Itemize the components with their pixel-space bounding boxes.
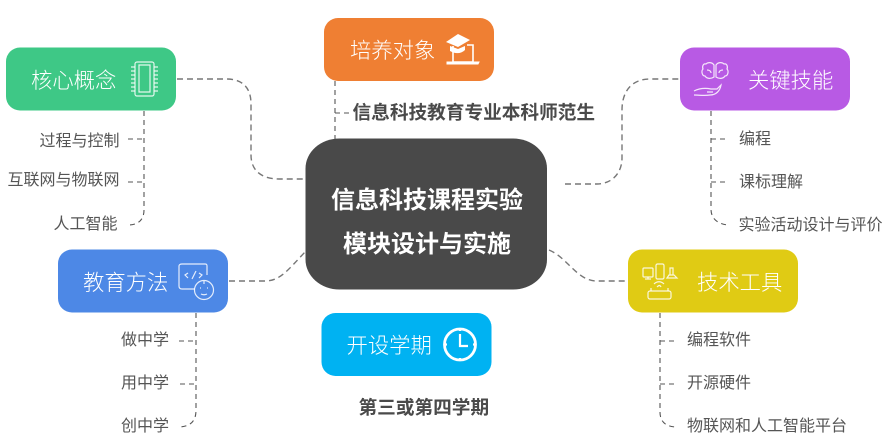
panel: 技术工具 — [628, 250, 798, 312]
panel: 教育方法: 教育方法 — [83, 271, 168, 295]
list: 关键技能 items — [738, 130, 883, 234]
connector: central topic to 核心概念 — [177, 79, 305, 179]
list: 关键技能 items: 编程 — [739, 130, 771, 148]
branch lines: 教育方法 — [179, 313, 196, 427]
branch lines: 关键技能 — [711, 111, 729, 225]
panel: 关键技能: 关键技能 — [748, 69, 833, 93]
list: 核心概念 items: 互联网与物联网 — [7, 171, 120, 189]
list: 关键技能 items: 实验活动设计与评价 — [738, 216, 883, 234]
list: 教育方法 items: 创中学 — [121, 417, 169, 435]
panel: 教育方法 — [58, 250, 228, 312]
connector: central topic to 技术工具 — [549, 250, 628, 281]
panel: 技术工具: 技术工具 — [697, 271, 782, 295]
icon: devices and router — [643, 264, 677, 299]
panel: 关键技能 — [680, 48, 850, 110]
branch lines: 培养对象 — [335, 112, 353, 114]
panel: 开设学期 — [322, 313, 492, 376]
panel: 核心概念 — [6, 48, 176, 110]
text: semester: 第三或第四学期 — [358, 397, 489, 418]
central title: 模块设计与实施 — [343, 231, 511, 258]
list: 教育方法 items: 用中学 — [121, 374, 169, 392]
branch lines: 技术工具 — [660, 313, 677, 427]
list: 核心概念 items: 过程与控制 — [39, 132, 120, 150]
central title — [331, 186, 523, 258]
list: 技术工具 items: 开源硬件 — [687, 374, 751, 392]
panel: 开设学期: 开设学期 — [346, 334, 432, 358]
icon: chip — [131, 62, 158, 96]
connector: central topic to 培养对象 — [334, 81, 336, 139]
list: 技术工具 items: 物联网和人工智能平台 — [687, 417, 847, 435]
list: 教育方法 items: 做中学 — [121, 331, 169, 349]
icon: code window and face — [179, 264, 214, 300]
list: 核心概念 items — [7, 132, 120, 233]
list: 核心概念 items: 人工智能 — [53, 215, 118, 233]
panel: 培养对象 — [324, 18, 494, 81]
central topic — [306, 138, 547, 290]
panel: 核心概念: 核心概念 — [31, 69, 116, 93]
list: 技术工具 items — [687, 331, 847, 435]
central title: 信息科技课程实验 — [331, 186, 523, 214]
branch lines: 核心概念 — [128, 111, 144, 225]
icon: graduation cap and laptop — [446, 34, 479, 64]
list: 技术工具 items: 编程软件 — [687, 331, 751, 349]
list: 关键技能 items: 课标理解 — [739, 173, 803, 191]
connector: central topic to 教育方法 — [229, 252, 305, 281]
icon: clock — [444, 328, 476, 361]
connector: central topic to 关键技能 — [565, 79, 680, 184]
list: 教育方法 items — [121, 331, 169, 435]
panel: 培养对象: 培养对象 — [350, 39, 435, 63]
text: training target: 信息科技教育专业本科师范生 — [352, 102, 595, 123]
icon: brain on hand — [694, 63, 728, 95]
